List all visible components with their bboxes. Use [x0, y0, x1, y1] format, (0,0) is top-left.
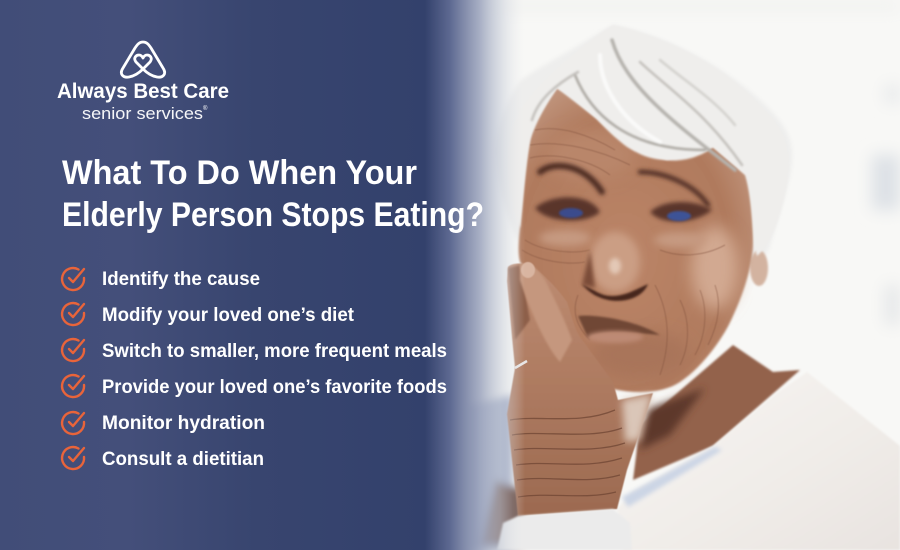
- under-eye bags: [539, 230, 706, 248]
- front finger: [520, 263, 572, 362]
- mouth: [578, 316, 660, 338]
- icon: check: [62, 412, 84, 434]
- title: What To Do When Your: [62, 154, 417, 192]
- fingernail: [521, 262, 535, 278]
- right eye: [667, 211, 691, 221]
- item: hydration: Monitor hydration: [102, 412, 265, 434]
- eye sockets: [535, 197, 712, 222]
- sweater: [617, 372, 900, 550]
- back finger shadow: [508, 265, 530, 340]
- icon: check: [62, 303, 84, 325]
- left eye: [559, 208, 583, 218]
- neck shadow: [640, 388, 705, 450]
- icon: check: [62, 339, 84, 361]
- item: favorite foods: Provide your loved one’s favorite foods: [102, 376, 447, 398]
- cuff: [497, 509, 632, 550]
- item: modify diet: Modify your loved one’s diet: [102, 304, 354, 326]
- hand: [507, 264, 653, 516]
- icon: check: [62, 268, 84, 290]
- navy left panel: [0, 0, 425, 550]
- hair strands: [532, 40, 742, 170]
- logo tagline: senior services: [82, 105, 203, 123]
- ear: [750, 250, 768, 286]
- fade overlay: [425, 0, 525, 550]
- title: [62, 154, 484, 234]
- item: identify the cause: Identify the cause: [102, 268, 260, 290]
- wrist highlight: [622, 394, 652, 442]
- neck: [633, 345, 800, 480]
- photo backdrop: [420, 0, 900, 550]
- knuckle wrinkles: [510, 410, 625, 497]
- eyebrows: [540, 166, 708, 205]
- checklist: [62, 268, 447, 470]
- nose: [590, 232, 640, 292]
- photo: senior woman with hand on cheek: [420, 0, 900, 550]
- logo icon: [121, 42, 165, 77]
- nose side shadow: [582, 250, 595, 288]
- icon: check: [62, 375, 84, 397]
- facial wrinkles: [522, 129, 725, 375]
- face: [518, 88, 753, 392]
- hair back: [495, 25, 792, 259]
- forehead tone: [545, 130, 635, 180]
- blurred window patches: [500, 2, 900, 325]
- lower lip: [587, 331, 643, 343]
- ring: [515, 361, 527, 368]
- nose highlight: [609, 258, 621, 274]
- jaw shading: [590, 331, 690, 379]
- shirt, lower left: [470, 395, 522, 550]
- cheek highlight: [691, 226, 739, 310]
- hair fringe: [507, 25, 789, 256]
- collar shade: [622, 447, 722, 507]
- registered mark: ®: [203, 105, 208, 112]
- item: smaller meals: Switch to smaller, more frequent meals: [102, 340, 447, 362]
- nostril shadow: [582, 284, 648, 301]
- item: dietitian: Consult a dietitian: [102, 448, 264, 470]
- logo: Always Best Care: [57, 42, 229, 123]
- title: Elderly Person Stops Eating?: [62, 196, 484, 234]
- icon: check: [62, 447, 84, 469]
- logo name: Always Best Care: [57, 80, 229, 103]
